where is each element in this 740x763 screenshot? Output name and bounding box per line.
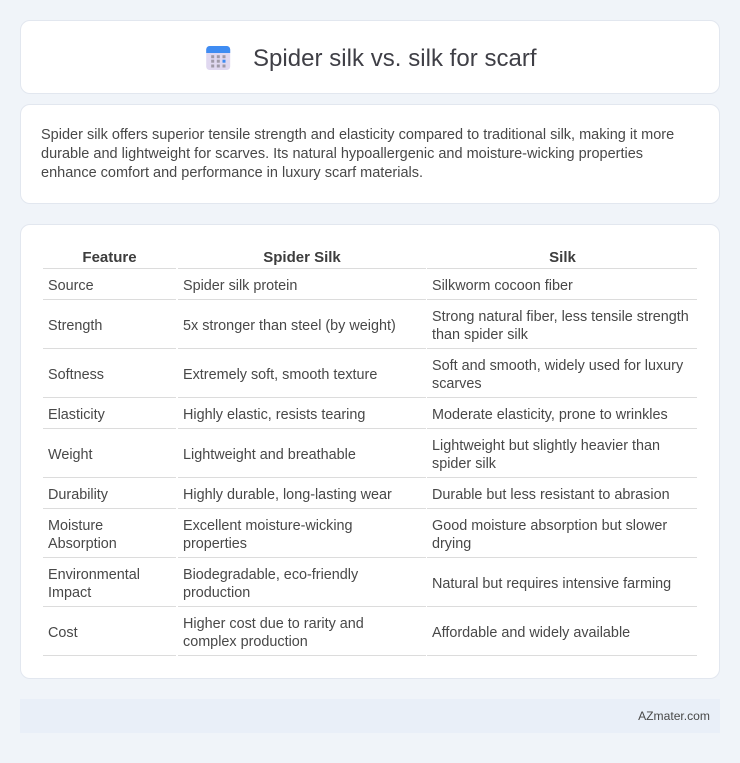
row: Durability: Highly durable, long-lasting wear [183, 487, 392, 503]
row: Cost [48, 616, 630, 650]
summary text [41, 127, 674, 181]
header: Spider Silk: Spider Silk [263, 249, 341, 266]
row: Environmental Impact: Impact [48, 585, 91, 601]
row: Weight: spider silk [432, 456, 496, 472]
panel: summary card [20, 104, 720, 204]
row: Environmental Impact: Environmental [48, 567, 140, 583]
panel: comparison table card [20, 224, 720, 679]
row: Softness: scarves [432, 376, 482, 392]
header: Feature: Feature [82, 249, 137, 266]
row: Source [48, 278, 573, 294]
row: Elasticity: Moderate elasticity, prone to wrinkles [432, 407, 668, 423]
row: Softness: Soft and smooth, widely used for luxury [432, 358, 683, 374]
row: Source: Source [48, 278, 94, 294]
row: Environmental Impact: Natural but requires intensive farming [432, 576, 671, 592]
row: Softness: Extremely soft, smooth texture [183, 367, 377, 383]
row: Elasticity [48, 407, 668, 423]
row: Environmental Impact [48, 567, 671, 601]
footer bar [20, 699, 720, 733]
row: Environmental Impact: Biodegradable, eco-friendly [183, 567, 358, 583]
row: Durability: Durable but less resistant to abrasion [432, 487, 670, 503]
row: Moisture Absorption: Good moisture absorption but slower [432, 518, 667, 534]
panel: title card [20, 20, 720, 94]
row: Softness: Softness [48, 367, 104, 383]
row: Source: Silkworm cocoon fiber [432, 278, 573, 294]
row: Strength: than spider silk [432, 327, 528, 343]
row: Weight: Lightweight and breathable [183, 447, 356, 463]
row: Softness [48, 358, 684, 392]
row: Strength: Strong natural fiber, less tensile strength [432, 309, 689, 325]
row: Strength: Strength [48, 318, 102, 334]
row: Durability: Durability [48, 487, 108, 503]
icon: calendar [206, 46, 230, 70]
header: Silk: Silk [549, 249, 576, 266]
row: Moisture Absorption [48, 518, 667, 552]
row: Weight: Lightweight but slightly heavier than [432, 438, 660, 454]
title: Spider silk vs. silk for scarf [253, 45, 537, 72]
row: Moisture Absorption: Absorption [48, 536, 117, 552]
row: Elasticity: Elasticity [48, 407, 105, 423]
row: Moisture Absorption: Excellent moisture-wicking [183, 518, 353, 534]
row: Moisture Absorption: properties [183, 536, 247, 552]
row: Cost: Affordable and widely available [432, 625, 630, 641]
row: Weight: Weight [48, 447, 93, 463]
footer credit: AZmater.com [638, 709, 710, 723]
summary text: durable and lightweight for scarves. Its natural hypoallergenic and moisture-wicking properties [41, 146, 643, 162]
row: Moisture Absorption: Moisture [48, 518, 103, 534]
row: Environmental Impact: production [183, 585, 250, 601]
row: Cost: complex production [183, 634, 308, 650]
row: Strength [48, 309, 689, 343]
row: Durability [48, 487, 670, 503]
row: Cost: Cost [48, 625, 78, 641]
row: Source: Spider silk protein [183, 278, 297, 294]
row: Moisture Absorption: drying [432, 536, 471, 552]
summary text: Spider silk offers superior tensile strength and elasticity compared to traditional silk, making it more [41, 127, 674, 143]
row: Weight [48, 438, 660, 472]
summary text: enhance comfort and performance in luxury scarf materials. [41, 165, 423, 181]
row: Cost: Higher cost due to rarity and [183, 616, 364, 632]
row: Elasticity: Highly elastic, resists tearing [183, 407, 365, 423]
row: Strength: 5x stronger than steel (by weight) [183, 318, 396, 334]
